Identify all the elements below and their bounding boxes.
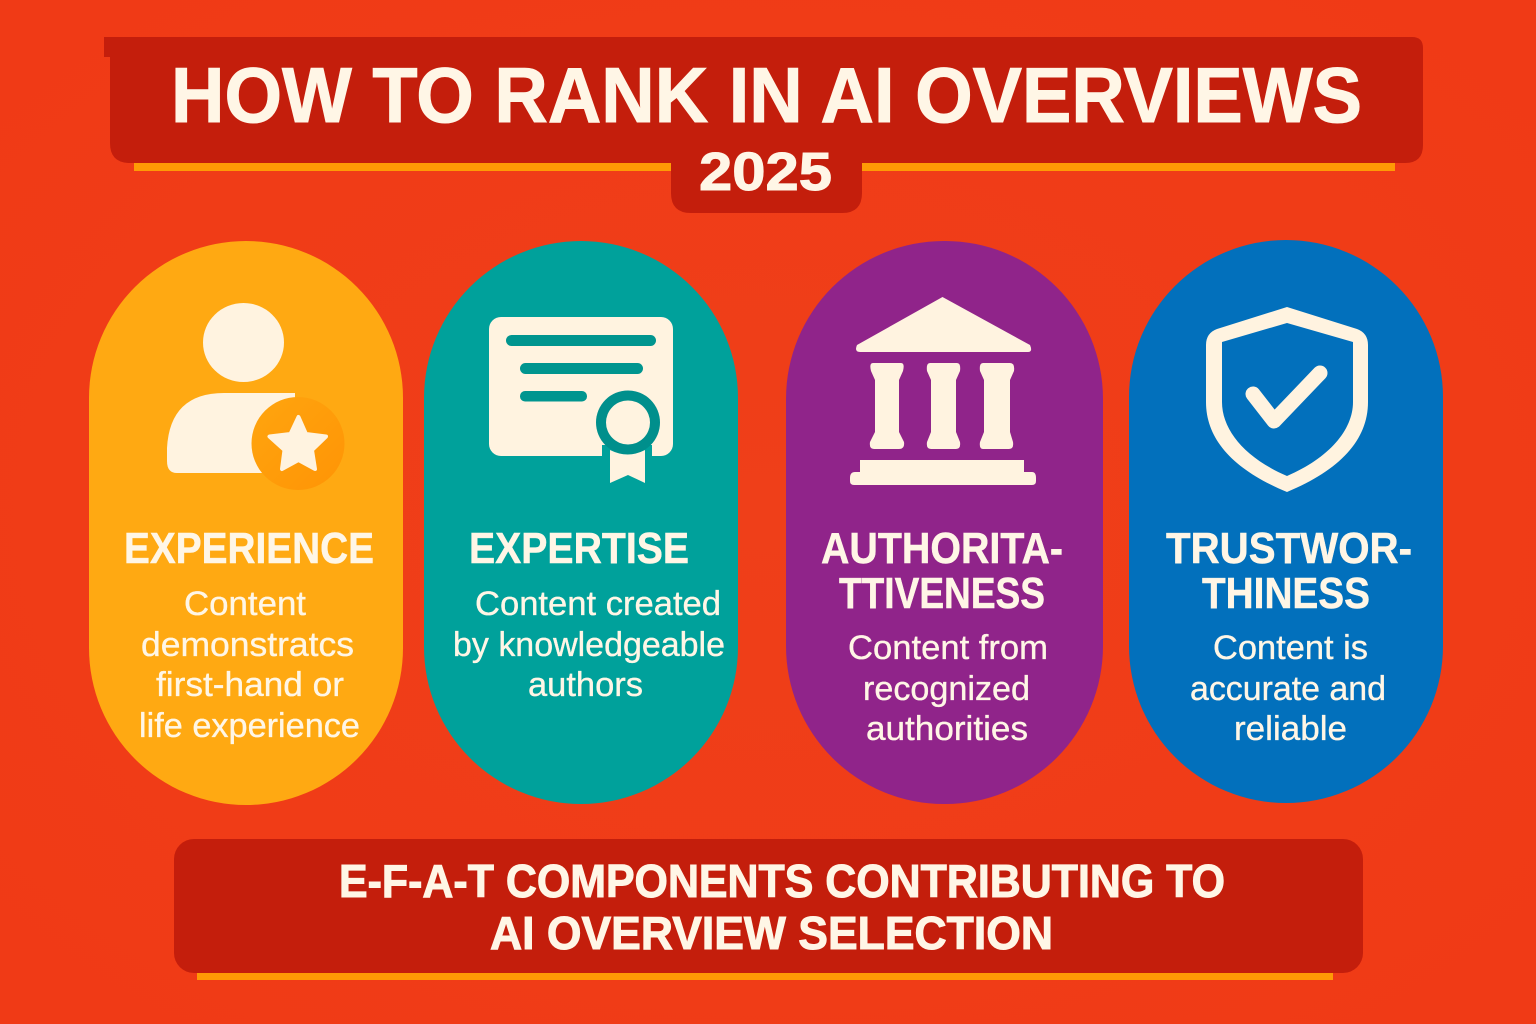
icon: institution building [850,297,1036,485]
footer text: AI OVERVIEW SELECTION [490,907,1053,959]
footer text [339,855,1225,959]
description: experience: life experience [139,707,360,745]
description: experience [139,585,360,745]
footer banner [174,839,1363,980]
description: expertise [453,585,725,704]
description: trustworthiness [1190,629,1386,748]
icon: shield with check [1206,307,1368,492]
heading: authoritativeness: AUTHORITA- [821,524,1063,573]
description: trustworthiness: Content is [1213,629,1368,667]
description: trustworthiness: reliable [1234,710,1347,748]
description: authoritativeness [848,629,1048,748]
panel: authoritativeness [786,241,1103,804]
description: authoritativeness: recognized [863,670,1030,708]
description: experience: demonstratcs [141,626,354,664]
description: authoritativeness: Content from [848,629,1048,667]
title banner [104,37,1423,171]
description: authoritativeness: authorities [866,710,1028,748]
footer text: E-F-A-T COMPONENTS CONTRIBUTING TO [339,855,1225,907]
heading: experience: EXPERIENCE [124,524,374,573]
description: trustworthiness: accurate and [1190,670,1386,708]
icon: person with star badge [167,303,344,490]
year tab: 2025 [699,142,832,202]
icon: certificate with seal [489,317,673,483]
heading: authoritativeness: TTIVENESS [839,569,1045,618]
panel: experience [89,241,403,805]
description: experience: first-hand or [156,666,344,704]
heading: trustworthiness [1166,524,1412,618]
heading: trustworthiness: TRUSTWOR- [1166,524,1412,573]
heading: authoritativeness [821,524,1063,618]
heading: trustworthiness: THINESS [1202,569,1370,618]
panel: expertise [424,241,738,804]
description: expertise: authors [528,666,643,704]
title: HOW TO RANK IN AI OVERVIEWS [171,51,1362,139]
description: experience: Content [184,585,307,623]
year tab [671,142,862,213]
description: expertise: Content created [475,585,721,623]
description: expertise: by knowledgeable [453,626,725,664]
heading: expertise: EXPERTISE [469,524,689,573]
panel: trustworthiness [1129,240,1443,803]
